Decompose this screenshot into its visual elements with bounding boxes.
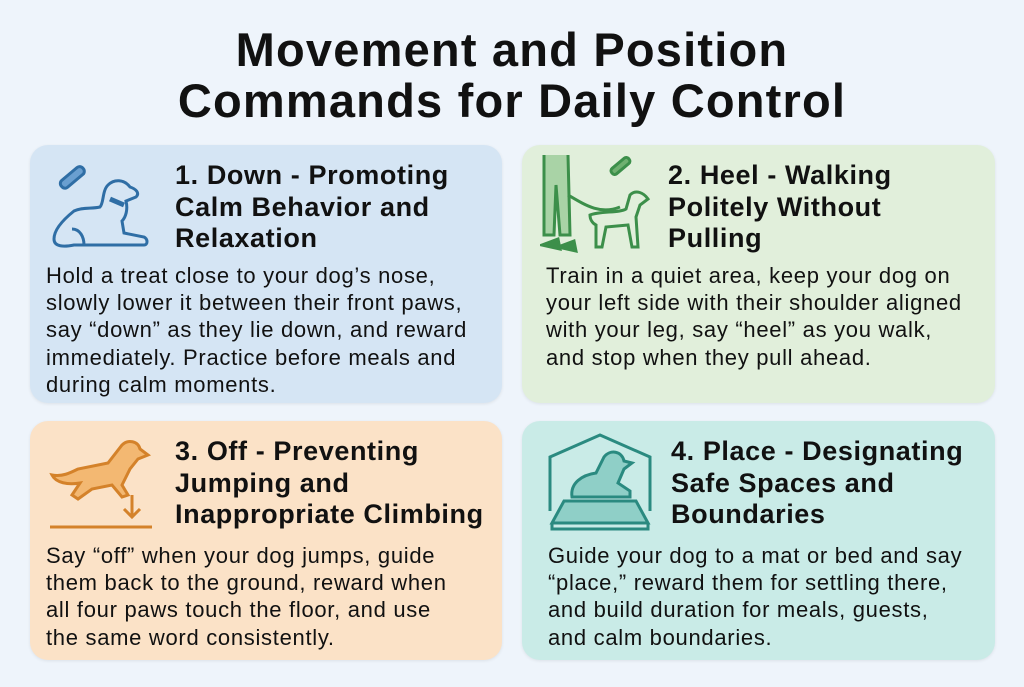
heading: 3. Off - Preventing: [175, 436, 419, 466]
body: and stop when they pull ahead.: [546, 345, 872, 370]
heading: Calm Behavior and: [175, 192, 430, 222]
body: them back to the ground, reward when: [46, 570, 447, 595]
heading: [668, 160, 892, 253]
icon: person walking dog: [540, 155, 650, 253]
heading: 2. Heel - Walking: [668, 160, 892, 190]
panel: place: [522, 421, 995, 660]
body: with your leg, say “heel” as you walk,: [546, 317, 932, 342]
body: and build duration for meals, guests,: [548, 597, 929, 622]
panel: heel: [522, 145, 995, 403]
body: Guide your dog to a mat or bed and say: [548, 543, 962, 568]
body: Train in a quiet area, keep your dog on: [546, 263, 950, 288]
heading: Pulling: [668, 223, 762, 253]
body: [548, 543, 962, 650]
heading: Relaxation: [175, 223, 318, 253]
heading: Inappropriate Climbing: [175, 499, 484, 529]
body: immediately. Practice before meals and: [46, 345, 456, 370]
body: slowly lower it between their front paws,: [46, 290, 462, 315]
body: your left side with their shoulder aligned: [546, 290, 962, 315]
heading: 4. Place - Designating: [671, 436, 963, 466]
body: “place,” reward them for settling there,: [548, 570, 948, 595]
heading: [175, 436, 484, 529]
body: during calm moments.: [46, 372, 276, 397]
body: the same word consistently.: [46, 625, 335, 650]
body: say “down” as they lie down, and reward: [46, 317, 467, 342]
heading: Politely Without: [668, 192, 881, 222]
heading: Safe Spaces and: [671, 468, 895, 498]
panel: off: [30, 421, 502, 660]
heading: Jumping and: [175, 468, 350, 498]
body: [46, 263, 467, 397]
heading: Boundaries: [671, 499, 826, 529]
panel: down: [30, 145, 502, 403]
icon: lying dog with bone: [52, 165, 148, 248]
icon: dog on bed in house: [548, 433, 652, 530]
body: Say “off” when your dog jumps, guide: [46, 543, 435, 568]
body: Hold a treat close to your dog’s nose,: [46, 263, 435, 288]
title: Commands for Daily Control: [178, 74, 846, 127]
icon: jumping dog with down arrow: [49, 440, 152, 528]
body: [46, 543, 447, 650]
body: [546, 263, 962, 370]
body: and calm boundaries.: [548, 625, 772, 650]
body: all four paws touch the floor, and use: [46, 597, 431, 622]
heading: [175, 160, 449, 253]
heading: 1. Down - Promoting: [175, 160, 449, 190]
title: [178, 23, 846, 127]
title: Movement and Position: [236, 23, 788, 76]
heading: [671, 436, 963, 529]
